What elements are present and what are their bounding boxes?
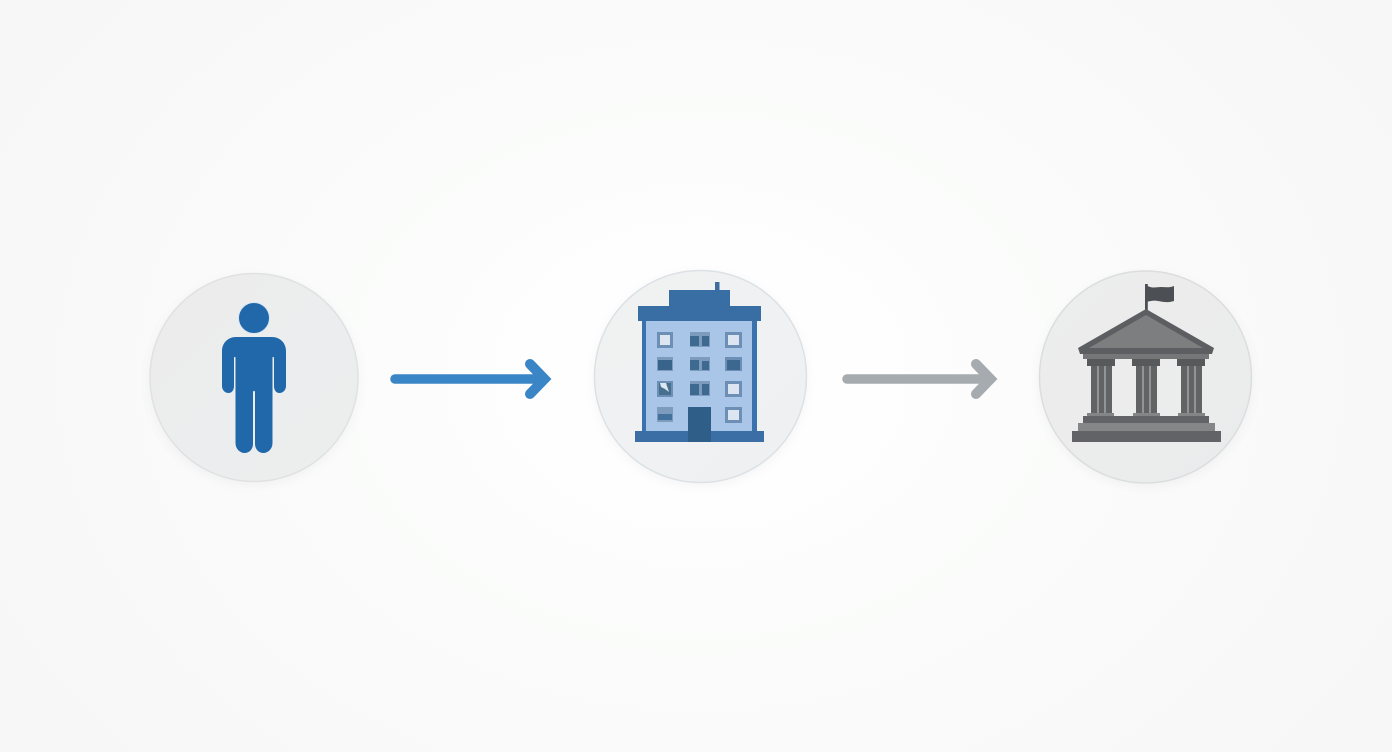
icon: person bbox=[222, 302, 286, 453]
windows bbox=[657, 332, 742, 423]
arrow: blue, person to building bbox=[395, 364, 544, 394]
panel: building step bbox=[594, 270, 806, 482]
panel: institution step bbox=[1040, 271, 1252, 483]
flag bbox=[1145, 284, 1174, 311]
steps bbox=[1072, 416, 1221, 442]
arrow: gray, building to institution bbox=[847, 364, 990, 394]
columns bbox=[1087, 359, 1205, 416]
pediment bbox=[1078, 309, 1214, 354]
panel: person step bbox=[150, 274, 358, 482]
icon: building bbox=[635, 282, 764, 442]
icon: government building bbox=[1072, 284, 1221, 442]
